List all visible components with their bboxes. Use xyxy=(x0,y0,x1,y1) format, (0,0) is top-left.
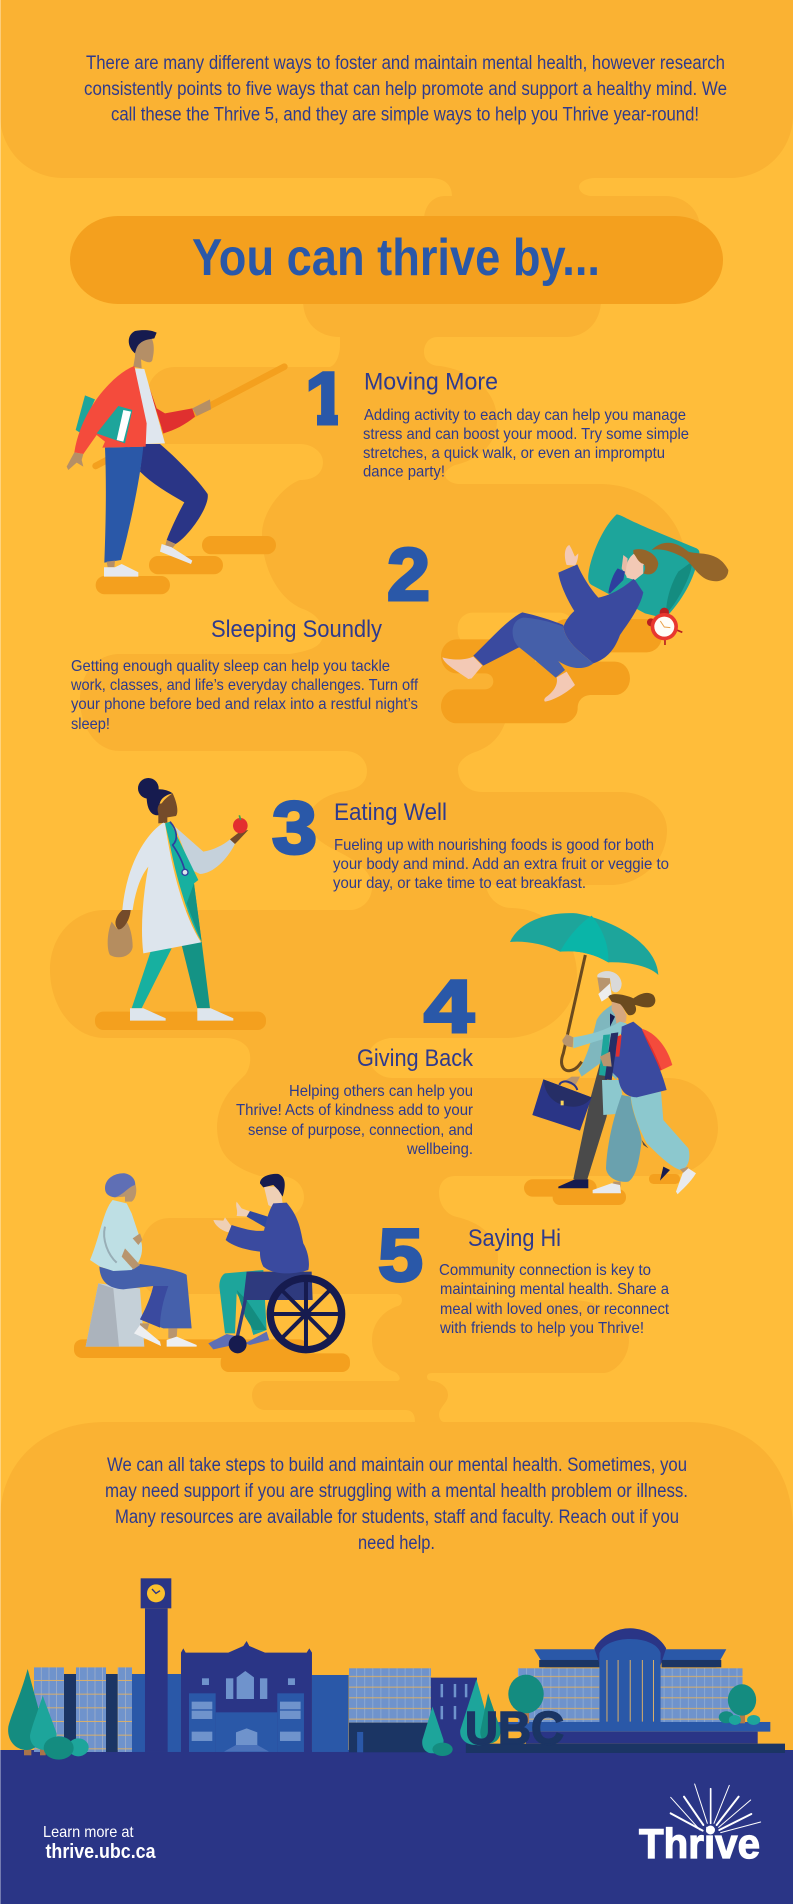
step 3 heading: Eating Well xyxy=(334,799,447,826)
closing paragraph: Many resources are available for students, staff and faculty. Reach out if you xyxy=(115,1507,679,1528)
step 4 text xyxy=(236,1083,474,1158)
step 4 text: Helping others can help you xyxy=(289,1083,473,1100)
closing paragraph: need help. xyxy=(358,1533,435,1554)
step 1 text: stress and can boost your mood. Try some simple xyxy=(363,426,689,443)
campus skyline: right side xyxy=(349,1628,785,1756)
step 2 text: Getting enough quality sleep can help you tackle xyxy=(71,658,390,675)
number 2: 2 xyxy=(387,533,430,616)
number 5: 5 xyxy=(378,1214,423,1297)
step 3 text xyxy=(333,837,669,892)
figure: woman falling on pillow xyxy=(441,514,728,723)
Thrive logo xyxy=(639,1784,761,1867)
figure: two people under umbrella xyxy=(510,913,696,1205)
closing paragraph: We can all take steps to build and maintain our mental health. Sometimes, you xyxy=(107,1455,687,1476)
step 2 text: your phone before bed and relax into a restful night’s xyxy=(71,696,418,713)
intro paragraph: consistently points to five ways that can help promote and support a healthy mind. We xyxy=(84,79,727,100)
step 4 text: sense of purpose, connection, and xyxy=(248,1122,473,1139)
step 2 text: work, classes, and life’s everyday challenges. Turn off xyxy=(70,677,419,694)
step 5 text xyxy=(439,1262,670,1337)
step 4 text: wellbeing. xyxy=(406,1141,473,1158)
step 5 text: maintaining mental health. Share a xyxy=(440,1281,669,1298)
intro paragraph: There are many different ways to foster and maintain mental health, however research xyxy=(86,53,725,74)
step 4 heading: Giving Back xyxy=(357,1045,474,1072)
step 3 text: your body and mind. Add an extra fruit or veggie to xyxy=(333,856,669,873)
figure: two people talking, wheelchair xyxy=(74,1173,350,1372)
intro paragraph: call these the Thrive 5, and they are simple ways to help you Thrive year-round! xyxy=(111,104,699,126)
closing paragraph xyxy=(105,1455,688,1554)
step 5 text: Community connection is key to xyxy=(439,1262,651,1279)
step 5 text: with friends to help you Thrive! xyxy=(439,1320,644,1337)
step 5 heading: Saying Hi xyxy=(468,1225,561,1252)
title: You can thrive by... xyxy=(192,229,600,287)
number 3: 3 xyxy=(272,786,317,869)
UBC letters: UBC xyxy=(465,1702,564,1754)
step 1 text: stretches, a quick walk, or even an impromptu xyxy=(363,445,665,462)
title pill xyxy=(70,216,723,304)
step 1 text: dance party! xyxy=(363,464,445,480)
number 4: 4 xyxy=(424,965,474,1048)
step 1 heading: Moving More xyxy=(364,368,498,396)
number 1: 1 xyxy=(305,357,347,440)
step 1 text: Adding activity to each day can help you manage xyxy=(364,407,686,424)
footer band xyxy=(0,1750,793,1904)
campus skyline: left side xyxy=(8,1578,349,1760)
step 3 text: Fueling up with nourishing foods is good for both xyxy=(334,837,654,854)
closing paragraph: may need support if you are struggling with a mental health problem or illness. xyxy=(105,1481,688,1502)
step 3 text: your day, or take time to eat breakfast. xyxy=(333,875,586,892)
step 2 text: sleep! xyxy=(71,716,110,733)
step 4 text: Thrive! Acts of kindness add to your xyxy=(236,1102,474,1119)
step 5 text: meal with loved ones, or reconnect xyxy=(440,1301,670,1318)
figure: doctor with apple xyxy=(95,778,266,1030)
learn more label: Learn more at xyxy=(43,1824,134,1841)
figure: man climbing steps xyxy=(67,330,284,594)
step 1 text xyxy=(363,407,689,480)
intro paragraph xyxy=(84,53,727,126)
logo rays xyxy=(671,1784,761,1833)
step 2 text xyxy=(70,658,419,733)
step 2 heading: Sleeping Soundly xyxy=(211,616,382,643)
website: thrive.ubc.ca xyxy=(46,1841,156,1863)
Thrive logo: Thrive xyxy=(639,1820,760,1867)
